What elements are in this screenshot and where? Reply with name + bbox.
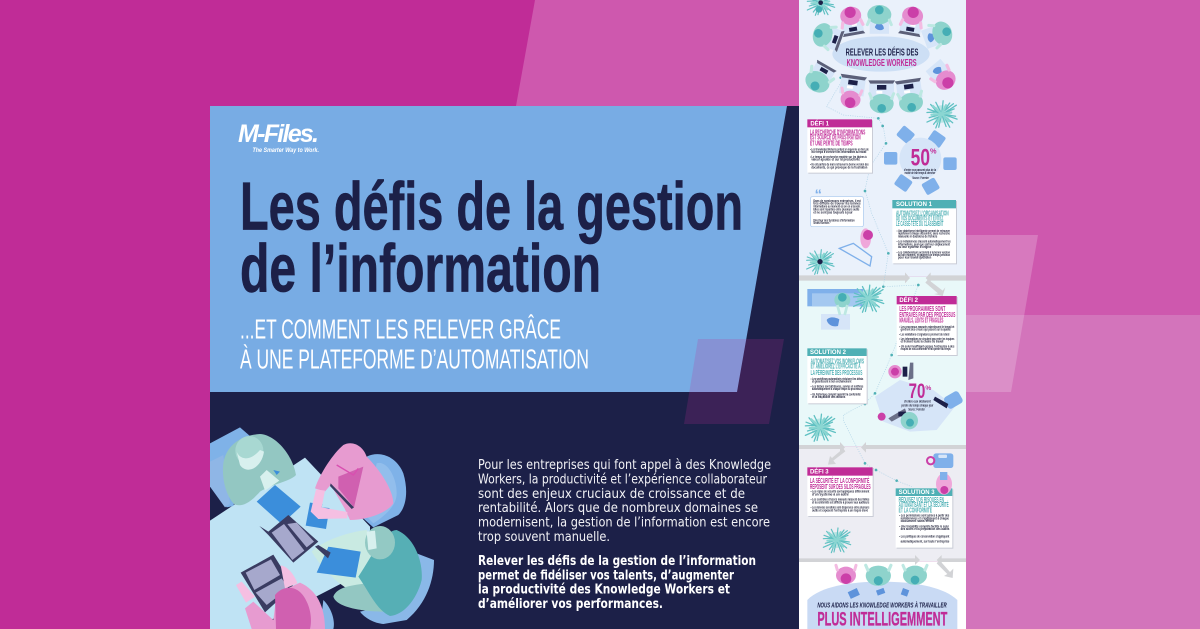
- card: solution 3: RÉDUISEZ VOS RISQUES EN: [899, 495, 944, 504]
- icon: dark plant: [807, 250, 834, 274]
- card: défi 1: • Les Knowledge Workers perdent en moyenne un tiers de: [810, 148, 869, 152]
- title: Les défis de la gestion: [240, 168, 743, 244]
- card: défi 3: outils et exposent l’entreprise à un risque élevé: [812, 508, 868, 512]
- card: défi 2: [897, 296, 958, 356]
- arrows between sections: [799, 272, 966, 578]
- card: défi 1: LA RECHERCHE D’INFORMATIONS: [810, 130, 865, 137]
- chart: desk group 70%: perdre du temps chaque jour: [901, 403, 934, 407]
- dotted connectors: [827, 78, 918, 487]
- card: solution 3: ET LA CONFORMITÉ: [899, 506, 932, 515]
- intro bold text block: la productivité des Knowledge Workers et: [478, 582, 730, 598]
- person 1: teal man: [210, 427, 301, 524]
- card: solution 3: SOLUTION 3: [899, 490, 935, 496]
- banner shape: [807, 582, 957, 629]
- section 3 background: [799, 447, 966, 562]
- card: solution 2: et la traçabilité des actions: [812, 395, 845, 399]
- card: solution 2: SOLUTION 2: [810, 350, 847, 356]
- card: solution 2: et garantissent le bon enchaînement: [812, 380, 852, 384]
- card: défi 2: • Les informations ne circulent pas entre les équipes: [899, 337, 954, 341]
- icon: plant: [805, 414, 835, 441]
- card: défi 3: [807, 467, 874, 517]
- chart: desk group 70%: 70: [909, 379, 925, 403]
- panel: infographic preview strip: REPOSENT SUR DES SILOS FRAGILES: [810, 484, 871, 491]
- card: solution 1: rapidement chaque document, sans recherche: [898, 232, 950, 236]
- banner text: NOUS AIDONS LES KNOWLEDGE WORKERS À TRAVAILLER: [817, 601, 947, 610]
- subtitle: [240, 314, 589, 374]
- card: défi 2: DÉFI 2: [899, 296, 919, 304]
- card: défi 3: • Les données sensibles sont dispersées entre plusieurs: [811, 506, 869, 510]
- icon: cup: [927, 453, 953, 468]
- section 2 background: [799, 277, 966, 447]
- card: solution 3: [896, 488, 953, 549]
- card: défi 2: génèrent des erreurs qui pèsent sur la qualité: [901, 328, 951, 332]
- chart: round table 50%: d’entre eux passent plus de la: [904, 168, 936, 172]
- card: solution 2: ET AMÉLIOREZ L’EFFICACITÉ À: [811, 361, 861, 370]
- title oval: RELEVER LES DÉFIS DES: [846, 46, 919, 59]
- card: défi 3: • Les règles de sécurité sont appliquées différemment: [811, 490, 870, 494]
- card: défi 2: • Les validations et signatures prennent du retard: [899, 332, 949, 336]
- intro text block: [478, 458, 771, 545]
- quote box: très difficile de trouver les bonnes: [813, 202, 861, 206]
- card: solution 1: ou leur système d’origine: [898, 245, 931, 249]
- logo: M-Files: M-Files.: [238, 120, 319, 148]
- card: solution 1: DE VOS DOCUMENTS ET ÉVITEZ: [896, 213, 944, 222]
- card: solution 2: automatiquement à chaque étape du processus: [812, 387, 862, 391]
- card: solution 3: • Une traçabilité complète facilite le suivi: [899, 524, 949, 528]
- card: solution 3: métadonnées et s’appliquent à chaque: [901, 516, 949, 520]
- intro text block: sont des enjeux cruciaux de croissance et de: [478, 487, 745, 502]
- quote box: et ne sont pas toujours à jour: [813, 210, 853, 214]
- card: défi 2: et freinent toute la chaîne de travail: [901, 340, 943, 344]
- card: défi 2: risques de non-conformité et fait perdre du temps: [901, 347, 951, 351]
- card: défi 2: MANUELS, LENTS ET FRAGILES: [899, 317, 943, 324]
- card: défi 1: valeur ajoutée et sur la productivité: [811, 157, 860, 161]
- intro text block: trop souvent manuelle.: [478, 530, 610, 545]
- quote box: [811, 187, 863, 227]
- quote box: Directeur des Systèmes d’Information: [813, 218, 855, 222]
- card: solution 1: informations, quel que soit leur emplacement: [898, 242, 951, 246]
- panel: cover page: [210, 106, 800, 629]
- table: [210, 458, 370, 629]
- chart: round table 50%: %: [930, 146, 937, 155]
- card: solution 1: SOLUTION 1: [896, 202, 933, 208]
- chart: round table 50%: moitié de leur temps à chercher: [905, 171, 936, 175]
- card: solution 1: au bon moment, et gagnent un temps précieux: [898, 253, 950, 257]
- section 4 background: [799, 562, 966, 629]
- intro text block: Workers, la productivité et l’expérience collaborateur: [478, 472, 768, 487]
- card: solution 3: • Les permissions sont gérées à partir des: [899, 514, 949, 518]
- card: solution 3: document sans effort: [901, 519, 935, 523]
- icon: plant: [854, 285, 884, 312]
- card: défi 2: • Un suivi insuffisant expose l’entreprise à des: [899, 344, 954, 348]
- tablet: [241, 555, 293, 612]
- card: solution 2: • Les tâches sont attribuées, suivies et notifiées: [811, 384, 863, 388]
- title: [240, 168, 743, 306]
- card: défi 3: DÉFI 3: [810, 467, 829, 475]
- intro bold text block: [478, 554, 756, 612]
- chart: round table 50%: 50: [911, 145, 930, 172]
- card: défi 1: • Ils ont parfois du mal à retrouver la bonne version des: [810, 163, 869, 167]
- card: solution 1: AUTOMATISEZ L’ORGANISATION: [896, 210, 949, 217]
- cover blue header shape: [210, 106, 787, 392]
- title oval: [832, 36, 930, 72]
- connector nodes: [839, 76, 920, 482]
- card: défi 3: LA SÉCURITÉ ET LA CONFORMITÉ: [810, 476, 869, 485]
- cover navy background: [210, 106, 800, 629]
- icon: pink person with desk: [839, 228, 873, 266]
- icon: pink person with blue laptop: [936, 472, 952, 495]
- card: solution 2: • Les workflows automatisés réduisent les délais: [811, 377, 863, 381]
- chart: round table 50%: [884, 125, 957, 195]
- chart: desk group 70%: [875, 363, 964, 432]
- illustration: team around a table: [210, 427, 434, 629]
- chart: round table 50%: Source : Forrester: [912, 176, 929, 180]
- card: solution 1: [892, 200, 957, 264]
- card: solution 2: • Un historique complet garantit la conformité: [811, 392, 861, 396]
- intro text block: rentabilité. Alors que de nombreux domaines se: [478, 501, 758, 516]
- card: solution 1: • Les métadonnées classent automatiquement les: [897, 240, 951, 244]
- subtitle: À UNE PLATEFORME D’AUTOMATISATION: [240, 344, 589, 374]
- card: solution 3: des accès et la préparation des audits: [901, 527, 949, 531]
- logo: M-Files: The Smarter Way to Work.: [252, 147, 319, 154]
- intro text block: Pour les entreprises qui font appel à des Knowledge: [478, 458, 771, 473]
- person 4: pink woman: [236, 565, 334, 629]
- background: translucent parallelogram, right: [960, 235, 1038, 392]
- card: solution 1: • Une plateforme intelligente permet de retrouver: [897, 229, 950, 233]
- translucent parallelogram accent: [684, 339, 784, 424]
- background: lighter pink band, right: [966, 315, 1200, 629]
- icons: people around the table: [801, 5, 960, 114]
- card: solution 3: automatiquement, sur toute l’entreprise: [901, 540, 949, 544]
- card: défi 3: d’un système à un autre: [812, 492, 849, 496]
- quote box: informations au moment où on en a besoin.: [813, 204, 861, 208]
- subtitle: ...ET COMMENT LES RELEVER GRÂCE: [240, 314, 561, 344]
- intro bold text block: permet de fidéliser vos talents, d’augmenter: [478, 568, 734, 583]
- card: défi 1: leur temps à chercher des informations au travail: [811, 150, 866, 154]
- card: défi 1: DÉFI 1: [810, 119, 830, 127]
- title: de l’information: [240, 230, 601, 306]
- person 3: teal man with notebook: [312, 526, 434, 624]
- background: light pink angled panel, top: [516, 0, 1200, 316]
- card: solution 3: • Les politiques de conservation s’appliquent: [899, 534, 950, 538]
- card: solution 1: • Les collaborateurs accèdent à la bonne version: [897, 250, 950, 254]
- laptop: [259, 515, 318, 563]
- quote box: “: [815, 187, 822, 203]
- card: défi 2: ENTRAVÉS PAR DES PROCESSUS: [899, 310, 955, 319]
- quote box: Secteur Services: [813, 221, 829, 225]
- panel: infographic preview strip: AUTOMATISANT ET LA SÉCURITÉ: [899, 500, 949, 509]
- title oval: KNOWLEDGE WORKERS: [847, 58, 917, 69]
- chart: desk group 70%: Source : Forrester: [908, 408, 925, 412]
- card: défi 2: • Les processus manuels ralentissent le travail et: [899, 325, 955, 329]
- panel: infographic preview strip: AUTOMATISEZ VOS WORKFLOWS: [811, 358, 864, 365]
- card: défi 3: • Les contrôles d’accès manuels laissent des failles: [811, 498, 869, 502]
- card: solution 1: manuelle ni doublons de fichiers: [898, 234, 937, 238]
- card: défi 1: documents, ce qui provoque de la frustration: [811, 165, 867, 169]
- quote box: Dans de nombreuses entreprises, il est: [813, 199, 861, 203]
- intro bold text block: Relever les défis de la gestion de l’information: [478, 554, 756, 569]
- icon: plant: [927, 101, 957, 128]
- panel: infographic preview strip: [799, 0, 966, 629]
- person 2: pink woman: [306, 443, 406, 529]
- icon: sofa with person: [807, 289, 863, 330]
- card: défi 3: et la conformité est difficile à prouver aux auditeurs: [812, 500, 869, 504]
- closing banner: [807, 565, 957, 629]
- banner people: [836, 565, 856, 584]
- card: défi 1: • Le temps de recherche empiète sur les tâches à: [810, 155, 867, 159]
- card: solution 1: LE CASSE-TÊTE DU CLASSEMENT: [896, 219, 944, 228]
- intro bold text block: d’améliorer vos performances.: [478, 597, 663, 612]
- chart: desk group 70%: %: [925, 385, 931, 392]
- card: défi 1: EST SOURCE DE FRUSTRATION: [810, 135, 861, 142]
- quote box: Elles sont réparties entre plusieurs outils: [813, 208, 859, 212]
- icon: top plant: [807, 0, 835, 15]
- chart: desk group 70%: d’entre eux déclarent: [904, 399, 931, 403]
- card: solution 1: pour leur travail quotidien: [898, 256, 931, 260]
- icon: plant: [823, 528, 851, 553]
- section 1 background: [799, 0, 966, 277]
- card: défi 1: ET UNE PERTE DE TEMPS: [810, 141, 853, 148]
- card: solution 2: [807, 348, 868, 404]
- card: défi 2: LES PROGRAMMES SONT: [899, 306, 946, 313]
- card: solution 2: LA PÉRENNITÉ DES PROCESSUS: [811, 368, 862, 377]
- card: défi 1: [807, 119, 873, 174]
- intro text block: modernisent, la gestion de l’information est encore: [478, 516, 770, 531]
